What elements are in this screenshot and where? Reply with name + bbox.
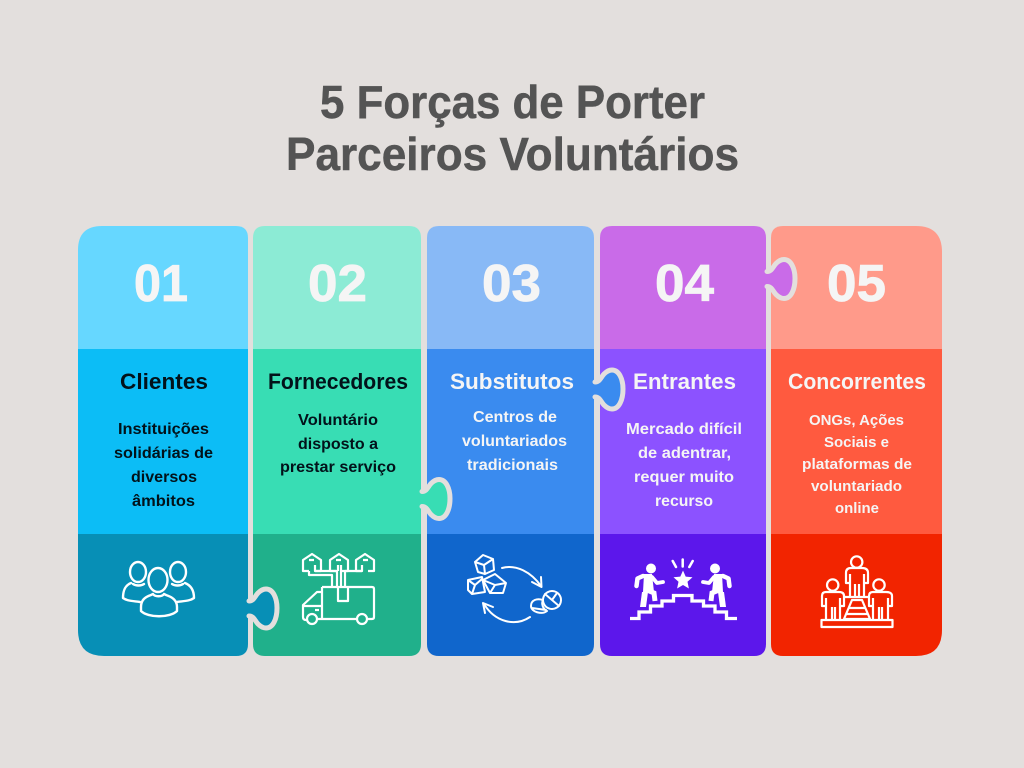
title: 5 Forças de Porter <box>320 76 705 128</box>
number 03: 03 <box>482 255 541 313</box>
text: Entrantes description: requer muito <box>634 469 734 486</box>
heading: Fornecedores: Fornecedores <box>268 369 408 394</box>
icon: climbers reaching a star <box>630 560 737 618</box>
text: Fornecedores description <box>280 412 396 476</box>
text: Clientes description: diversos <box>131 469 197 486</box>
number 05: 05 <box>827 255 886 313</box>
heading: Substitutos: Substitutos <box>450 369 574 394</box>
icon: delivery truck <box>303 554 374 624</box>
icon: group of people <box>123 562 194 616</box>
text: Clientes description <box>114 421 213 510</box>
number 02: 02 <box>308 255 367 313</box>
text: Substitutos description: voluntariados <box>462 433 567 450</box>
text: Substitutos description: tradicionais <box>467 457 558 474</box>
text: Entrantes description: Mercado difícil <box>626 421 742 438</box>
number 04: 04 <box>655 255 714 313</box>
text: Clientes description: âmbitos <box>132 493 195 510</box>
text: Entrantes description: de adentrar, <box>638 445 731 462</box>
title: Parceiros Voluntários <box>286 128 739 180</box>
text: Concorrentes description: Sociais e <box>824 435 889 451</box>
text: Fornecedores description: disposto a <box>298 436 378 453</box>
panel: 04 Entrantes <box>600 226 766 656</box>
heading: Entrantes: Entrantes <box>633 369 736 394</box>
text: Concorrentes description: ONGs, Ações <box>809 413 904 429</box>
connector: puzzle tab 01 to 02 <box>248 589 277 628</box>
connector: puzzle tab 03 to 04 <box>594 370 623 409</box>
text: Concorrentes description: plataformas de <box>802 457 912 473</box>
panel: 05 Concorrentes <box>771 226 942 656</box>
heading: Clientes: Clientes <box>120 369 208 394</box>
text: Entrantes description: recurso <box>655 493 713 510</box>
connector: puzzle tab 04 to 05 <box>766 260 795 298</box>
text: Concorrentes description: online <box>835 501 879 517</box>
text: Fornecedores description: Voluntário <box>298 412 378 429</box>
icon: three people on a podium <box>822 556 892 627</box>
text: Fornecedores description: prestar serviço <box>280 459 396 476</box>
text: Entrantes description <box>626 421 742 510</box>
heading: Concorrentes: Concorrentes <box>788 369 926 394</box>
text: Clientes description: Instituições <box>118 421 209 438</box>
panel: 03 Substitutos <box>427 226 594 656</box>
panel: 01 Clientes <box>78 226 248 656</box>
number 01: 01 <box>134 255 188 313</box>
text: Clientes description: solidárias de <box>114 445 213 462</box>
text: Concorrentes description <box>802 413 912 517</box>
text: Substitutos description: Centros de <box>473 409 557 426</box>
connector: puzzle tab 02 to 03 <box>421 480 450 518</box>
icon: cubes and pills cycle <box>468 555 564 622</box>
panel: 02 Fornecedores <box>253 226 421 656</box>
text: Concorrentes description: voluntariado <box>811 479 902 495</box>
title <box>286 76 739 180</box>
text: Substitutos description <box>462 409 567 474</box>
